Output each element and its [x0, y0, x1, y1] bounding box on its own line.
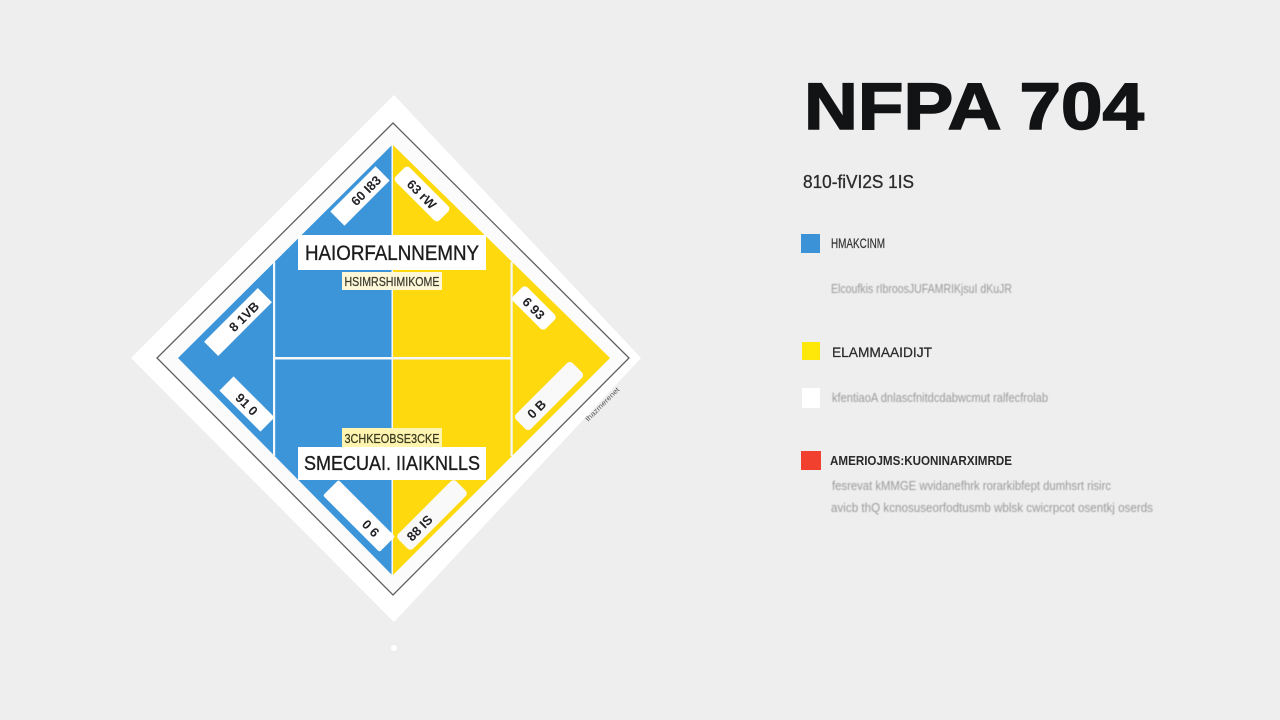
subtitle: 810-fiVI2S 1IS — [803, 172, 914, 192]
small edge caption: Ihazmerenet — [585, 387, 621, 423]
legend description line 2: avicb thQ kcnosuseorfodtusmb wblsk cwicrpcot osentkj oserds — [831, 500, 1153, 515]
label: hazard heading — [298, 235, 486, 270]
label: special hazards heading: SMECUAI. IIAIKNLLS — [304, 453, 480, 475]
legend: flammability — [802, 342, 1048, 408]
tag: blue left upper — [204, 288, 272, 356]
tag: blue left lower — [219, 376, 275, 432]
label: special hazards sub-heading — [342, 428, 442, 447]
NFPA 704 diamond — [131, 95, 641, 622]
title: NFPA 704 — [804, 69, 1144, 143]
tag: yellow top edge: 63 rW — [404, 177, 440, 213]
tag: yellow bottom edge: 88 IS — [404, 512, 436, 544]
swatch: blue — [801, 234, 820, 253]
tag: blue top edge: 60 I83 — [348, 173, 384, 209]
blue health quadrant — [178, 145, 392, 575]
legend description: health: Elcoufkis rIbroosJUFAMRIKjsuI dKuJR — [831, 281, 1012, 296]
tag: yellow bottom edge — [396, 479, 468, 551]
yellow flammability quadrant — [393, 145, 610, 575]
tag: yellow top edge — [393, 165, 451, 223]
legend heading: reactivity: AMERIOJMS:KUONINARXIMRDE — [830, 453, 1012, 468]
label: hazard sub-heading: HSIMRSHIMIKOME — [344, 274, 440, 289]
label: special hazards sub-heading: 3CHKEOBSE3CKE — [344, 431, 440, 446]
swatch: yellow — [802, 342, 820, 360]
swatch: white — [802, 388, 820, 408]
tag: yellow right lower: 0 B — [524, 397, 549, 422]
tag: blue bottom edge: 0 6 — [359, 517, 382, 540]
legend heading: health: HMAKCINM — [831, 235, 885, 251]
tag: yellow right upper: 6 93 — [519, 294, 548, 323]
legend description line 1: fesrevat kMMGE wvidanefhrk rorarkibfept dumhsrt risirc — [832, 478, 1111, 493]
tag: blue left upper: 8 1VB — [226, 299, 262, 335]
label: special hazards heading — [298, 447, 486, 480]
thin outline diamond — [157, 123, 629, 595]
panel divider lines — [273, 145, 513, 575]
swatch: red — [801, 451, 821, 470]
label: hazard heading: HAIORFALNNEMNY — [305, 242, 479, 265]
tag: blue top edge — [330, 166, 390, 226]
tag: yellow right upper — [511, 285, 557, 331]
tag: blue left lower: 91 0 — [232, 390, 261, 419]
tag: blue bottom edge — [323, 480, 395, 552]
tag: yellow right lower — [513, 360, 585, 432]
legend: health — [801, 234, 1012, 296]
white outer diamond — [131, 95, 641, 622]
legend: reactivity — [801, 451, 1153, 515]
small dot below diamond — [391, 645, 397, 651]
legend description: flammability: kfentiaoA dnlascfnitdcdabwcmut ralfecfrolab — [832, 390, 1048, 405]
legend heading: flammability: ELAMMAAIDIJT — [832, 344, 932, 360]
